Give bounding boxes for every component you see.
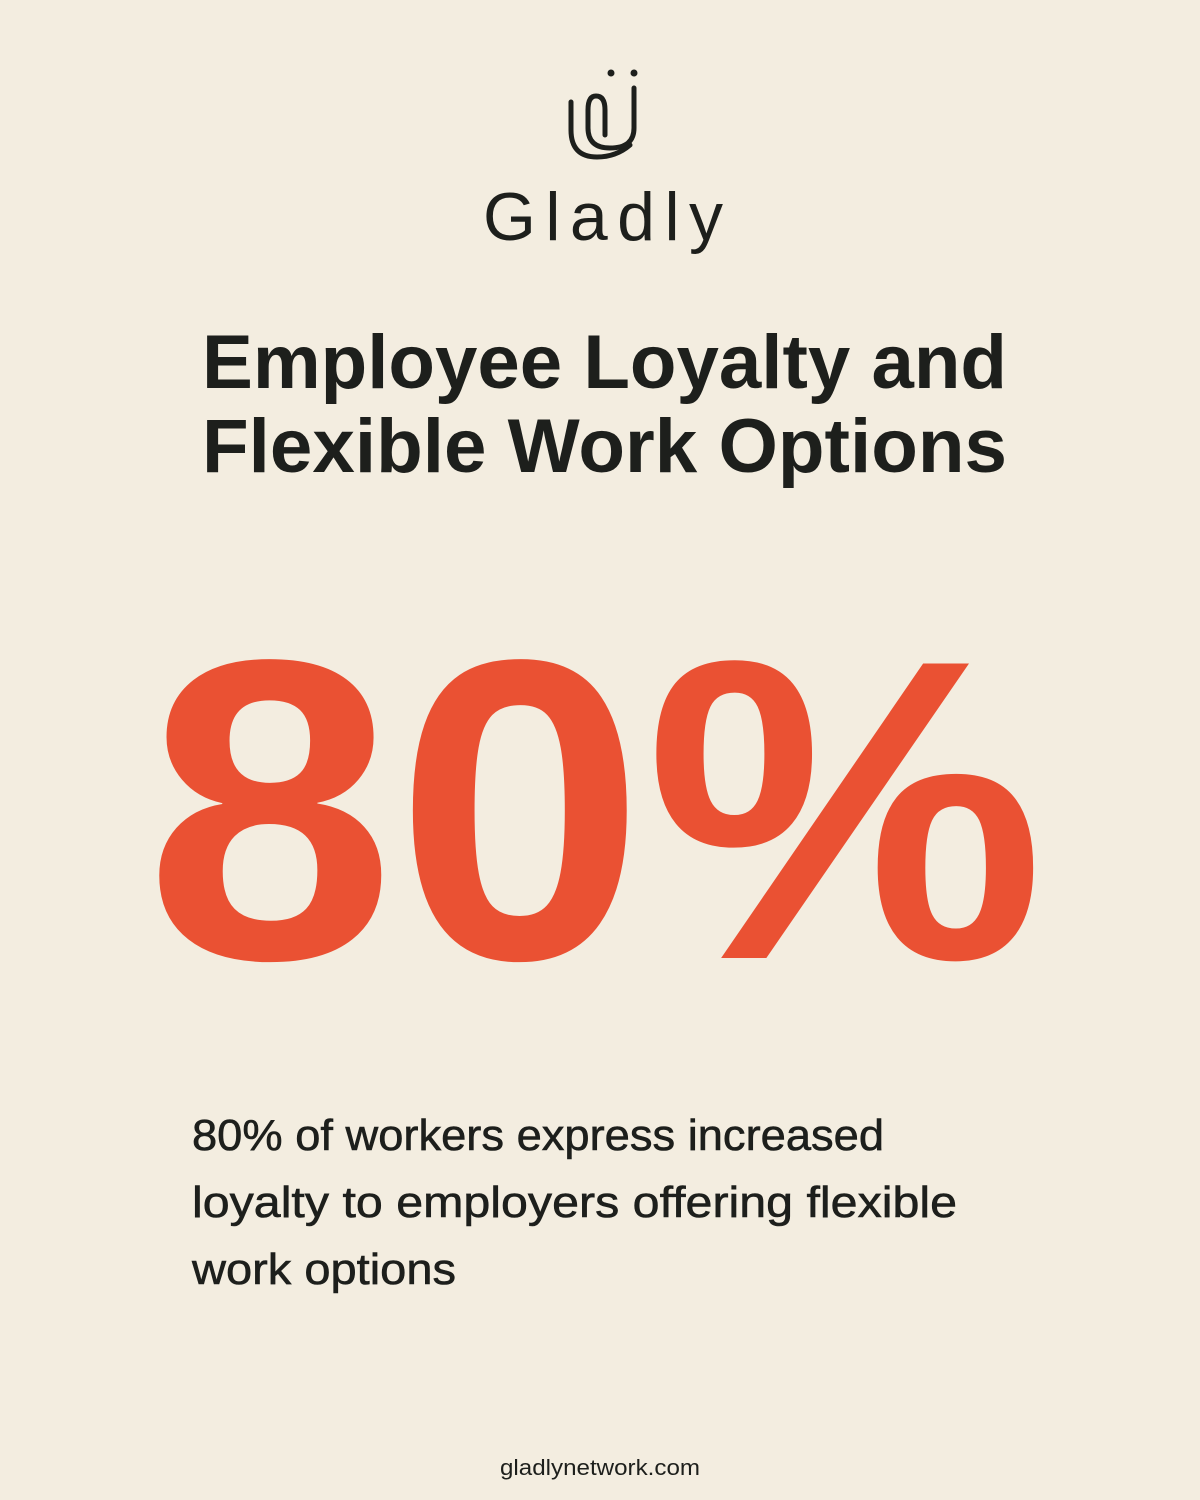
footer url: gladlynetwork.com [500,1455,700,1480]
description text: loyalty to employers offering flexible [192,1178,957,1227]
brand name: Gladly [483,179,723,255]
title [202,320,1007,489]
description text [191,1111,957,1294]
title: Employee Loyalty and [202,320,1007,405]
description text: 80% of workers express increased [192,1111,884,1160]
description text: work options [191,1245,456,1294]
icon: gladly logo [571,70,638,157]
title: Flexible Work Options [202,404,1007,489]
big stat: 80%: 80% [145,571,1045,1049]
